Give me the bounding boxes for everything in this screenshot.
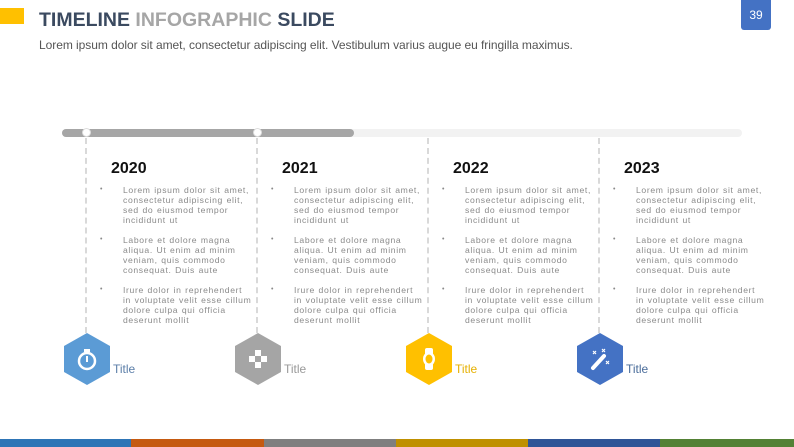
label: Title 4: Title (626, 362, 648, 376)
column 2021 (271, 160, 422, 325)
column 2022: in voluptate velit esse cillum dolore culpa qui officia deserunt mollit (465, 295, 593, 325)
column 2023: Lorem ipsum dolor sit amet, consectetur adipiscing elit, sed do eiusmod tempor incididunt ut (636, 185, 762, 225)
label: Title 3: Title (455, 362, 477, 376)
column 2020: Lorem ipsum dolor sit amet, consectetur adipiscing elit, sed do eiusmod tempor incididunt ut (123, 185, 249, 225)
icon: magic wand hexagon (577, 333, 623, 385)
column 2022: 2022 (453, 160, 489, 177)
column 2021: Labore et dolore magna aliqua. Ut enim ad minim veniam, quis commodo consequat. Duis aute (294, 235, 407, 275)
column 2020: Labore et dolore magna aliqua. Ut enim ad minim veniam, quis commodo consequat. Duis aute (123, 235, 236, 275)
column 2022 (442, 160, 593, 325)
column 2022: Irure dolor in reprehendert (465, 285, 584, 295)
column 2022: Labore et dolore magna aliqua. Ut enim ad minim veniam, quis commodo consequat. Duis aute (465, 235, 578, 275)
timeline bar (62, 129, 742, 137)
icon: gamepad hexagon (235, 333, 281, 385)
title: TIMELINE INFOGRAPHIC SLIDE (39, 9, 335, 31)
column 2022: Lorem ipsum dolor sit amet, consectetur adipiscing elit, sed do eiusmod tempor incididunt ut (465, 185, 591, 225)
page number: 39 (749, 8, 763, 22)
column 2021: Irure dolor in reprehendert (294, 285, 413, 295)
accent square (0, 8, 24, 24)
column 2021: in voluptate velit esse cillum dolore culpa qui officia deserunt mollit (294, 295, 422, 325)
column 2023: Irure dolor in reprehendert (636, 285, 755, 295)
page number (741, 0, 771, 30)
column 2023 (613, 160, 764, 325)
icon: watch hexagon (406, 333, 452, 385)
column 2020 (100, 160, 251, 325)
label: Title 1: Title (113, 362, 135, 376)
column 2021: 2021 (282, 160, 318, 177)
column 2023: Labore et dolore magna aliqua. Ut enim ad minim veniam, quis commodo consequat. Duis aute (636, 235, 749, 275)
column 2020: Irure dolor in reprehendert (123, 285, 242, 295)
column 2023: 2023 (624, 160, 660, 177)
subtitle: Lorem ipsum dolor sit amet, consectetur adipiscing elit. Vestibulum varius augue eu fringilla maximus. (39, 38, 573, 52)
column 2020: 2020 (111, 160, 147, 177)
column 2023: in voluptate velit esse cillum dolore culpa qui officia deserunt mollit (636, 295, 764, 325)
footer color bar (0, 439, 794, 447)
icon: stopwatch hexagon (64, 333, 110, 385)
label: Title 2: Title (284, 362, 306, 376)
column 2021: Lorem ipsum dolor sit amet, consectetur adipiscing elit, sed do eiusmod tempor incididunt ut (294, 185, 420, 225)
column 2020: in voluptate velit esse cillum dolore culpa qui officia deserunt mollit (123, 295, 251, 325)
